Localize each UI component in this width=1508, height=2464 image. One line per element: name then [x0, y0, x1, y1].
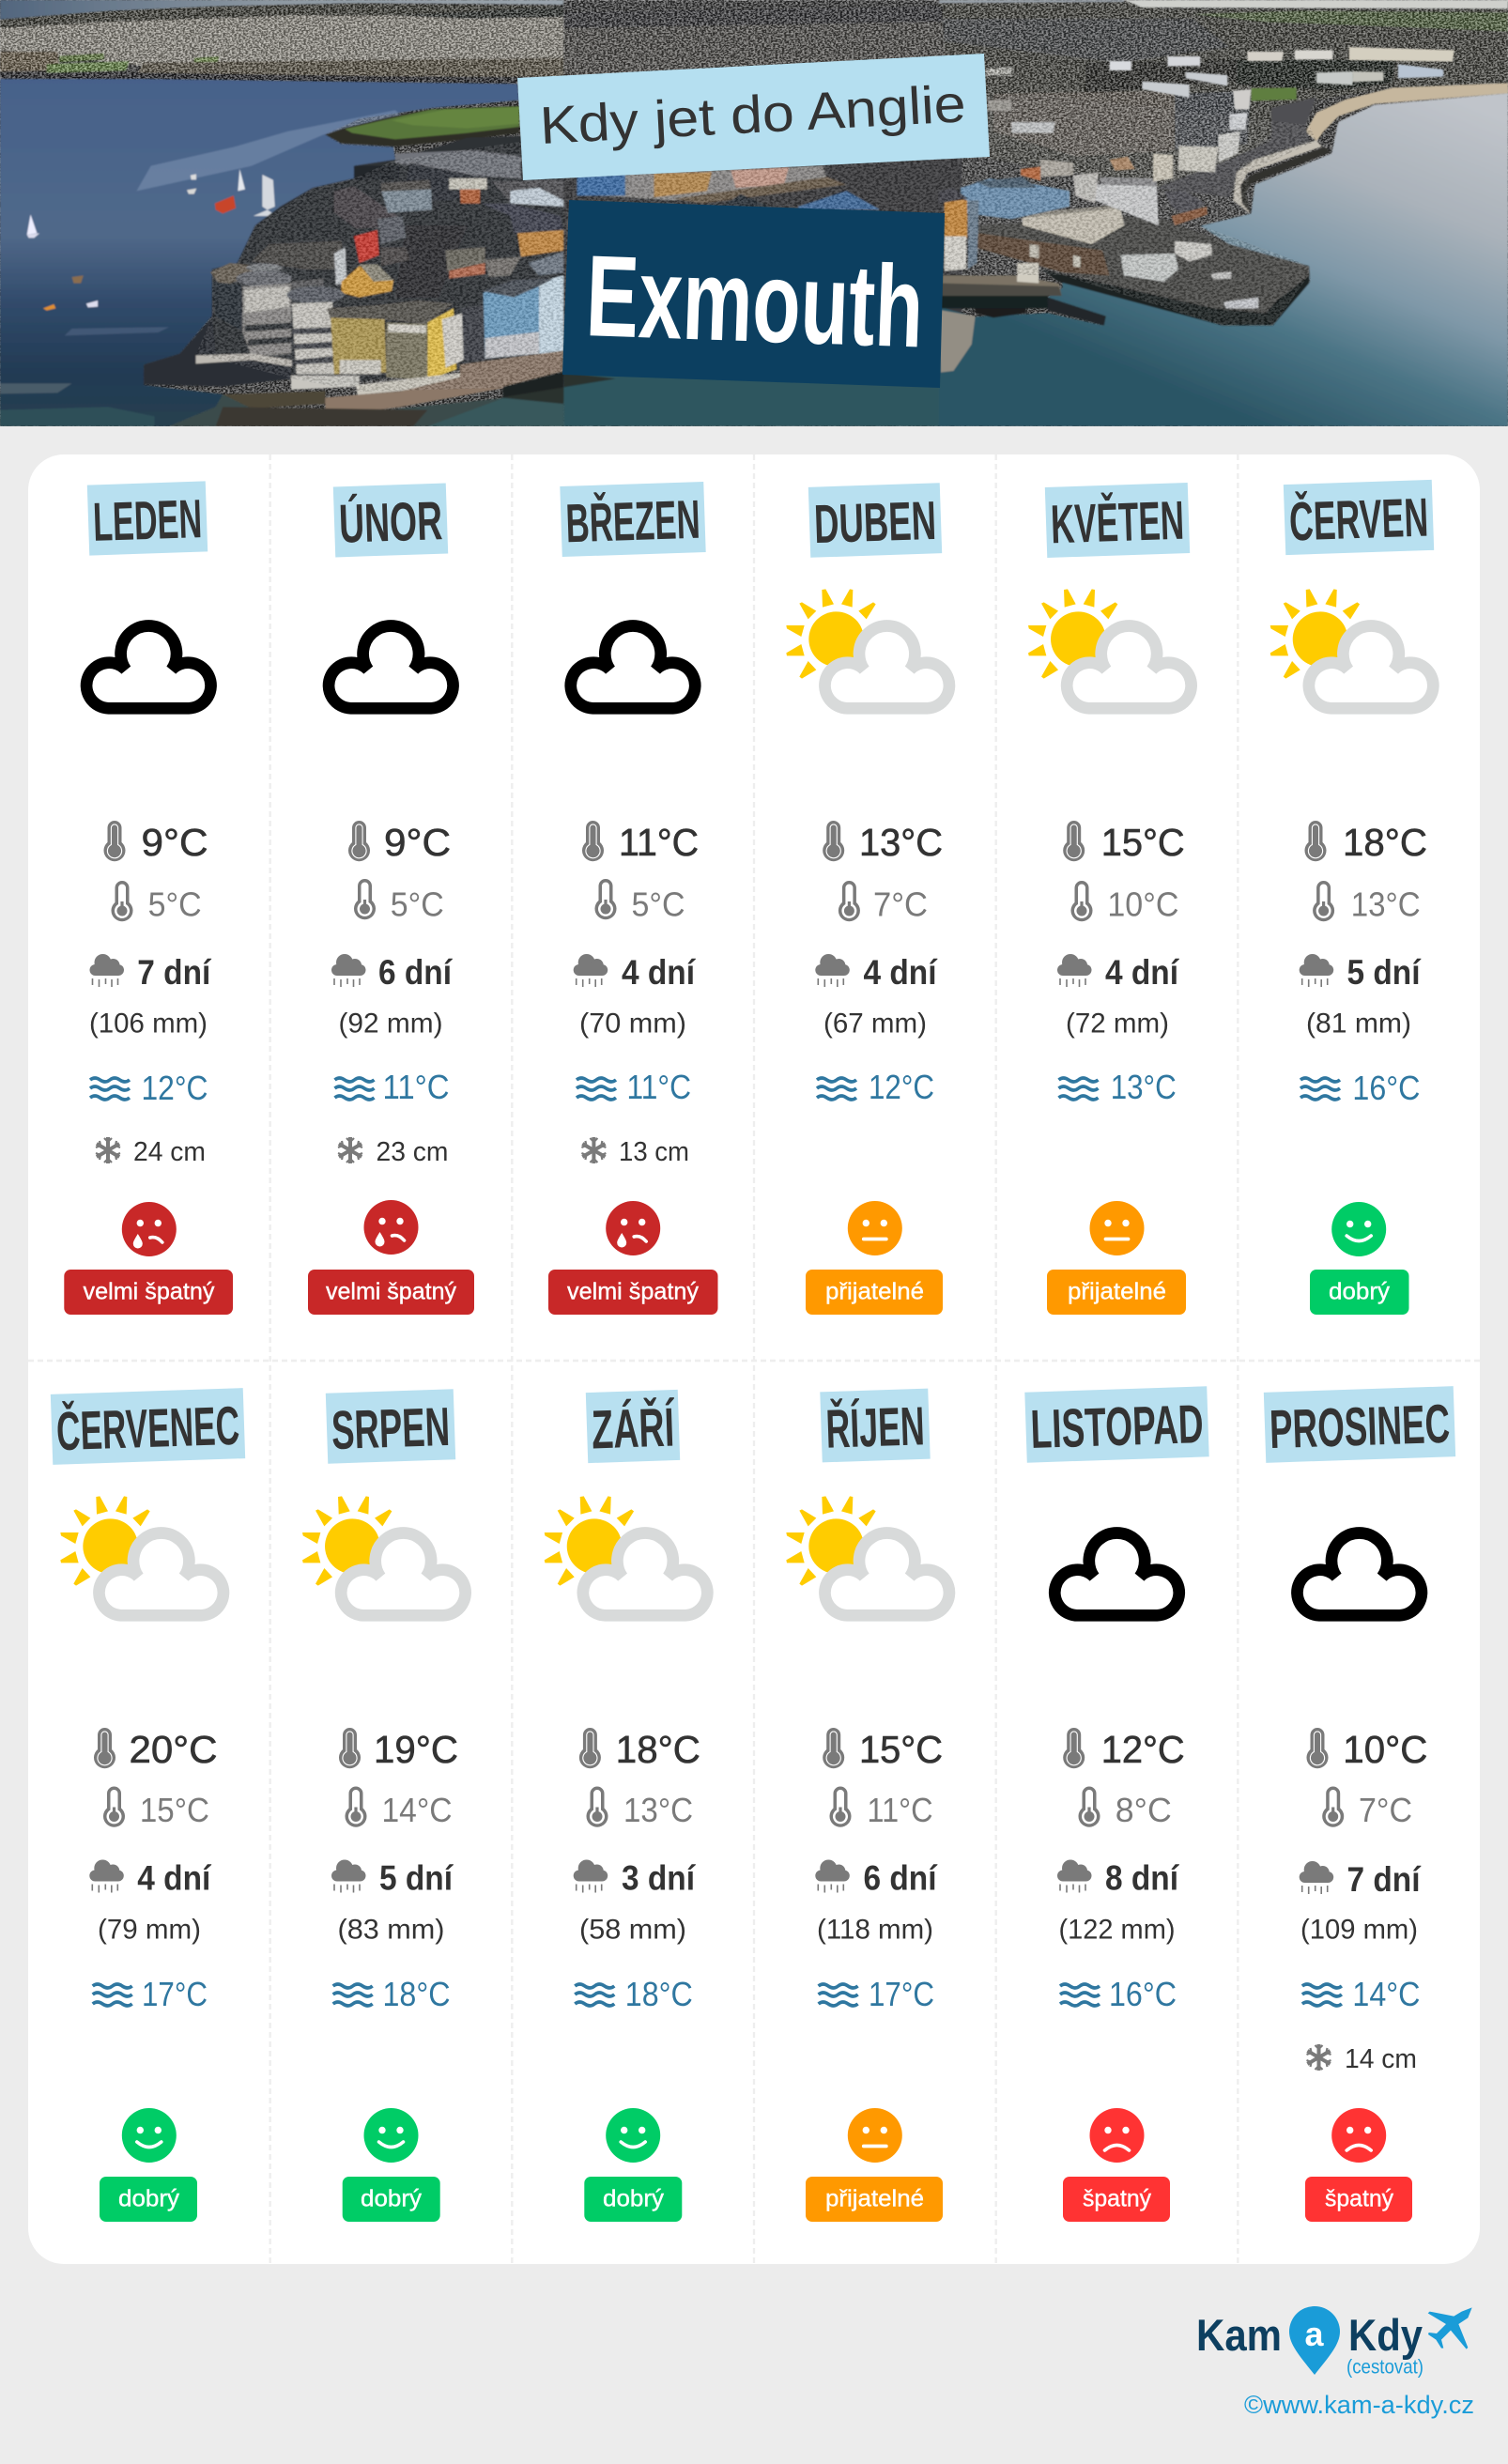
low temperature — [839, 881, 928, 924]
high temperature: 15°C — [859, 1728, 943, 1771]
rating badge — [64, 1270, 233, 1315]
weather icon: cloud — [1297, 1533, 1422, 1615]
high temperature — [1307, 1728, 1427, 1771]
month label — [586, 1390, 680, 1463]
column: listopad — [1024, 1386, 1209, 2222]
low temperature — [1070, 881, 1178, 924]
rating face — [848, 1201, 902, 1255]
low temperature — [354, 879, 444, 924]
rating badge: velmi špatný — [326, 1279, 456, 1305]
column: leden — [64, 481, 233, 1315]
rating face — [1089, 1201, 1144, 1255]
rainy days — [331, 1859, 454, 1897]
weather icon: cloud — [571, 626, 695, 708]
rating face — [122, 1202, 177, 1256]
high temperature — [579, 1728, 700, 1771]
month label — [820, 1389, 931, 1462]
rating badge — [343, 2177, 440, 2222]
rainy days: 3 dní — [622, 1859, 697, 1897]
rainy days — [1057, 953, 1180, 992]
month label: DUBEN — [813, 490, 937, 555]
sea temperature: 16°C — [1109, 1975, 1177, 2013]
precipitation: (58 mm) — [579, 1914, 686, 1946]
high temperature: 18°C — [616, 1728, 700, 1771]
icon: map pin: a — [1305, 2315, 1324, 2353]
sea temperature — [90, 1069, 208, 1107]
low temperature — [830, 1786, 933, 1829]
rating badge — [806, 2177, 943, 2222]
weather icon: sun and cloud — [302, 1496, 466, 1615]
rating badge: přijatelné — [1068, 1279, 1166, 1305]
month label: SRPEN — [331, 1396, 451, 1461]
snow — [1307, 2044, 1417, 2074]
weather icon: sun and cloud — [1270, 589, 1433, 708]
low temperature: 7°C — [873, 885, 928, 924]
high temperature — [339, 1728, 458, 1771]
rating badge — [1310, 1270, 1408, 1315]
rainy days: 5 dní — [379, 1859, 454, 1897]
rainy days — [90, 953, 212, 992]
weather icon: cloud — [1054, 1533, 1179, 1615]
weather icon: sun and cloud — [786, 1496, 949, 1615]
low temperature — [346, 1786, 453, 1829]
rating badge — [1063, 2177, 1170, 2222]
centre: coloured houses and harbour water — [500, 157, 962, 426]
rating badge: špatný — [1083, 2186, 1151, 2212]
sea temperature: 12°C — [869, 1068, 934, 1106]
rainy days: 4 dní — [864, 953, 938, 992]
rating badge — [584, 2177, 682, 2222]
sea temperature: 16°C — [1352, 1069, 1420, 1107]
low temperature: 5°C — [391, 885, 444, 924]
icon: airplane — [1428, 2307, 1472, 2349]
weather icon: sun and cloud — [786, 589, 949, 708]
rating face — [122, 2108, 177, 2163]
weather icon: cloud — [86, 626, 211, 708]
sea temperature — [1059, 1068, 1177, 1106]
rating badge — [548, 1270, 717, 1315]
high temperature — [94, 1728, 218, 1771]
title banner: Kdy jet do Anglie — [517, 54, 990, 180]
high temperature: 13°C — [859, 821, 943, 864]
rating badge: špatný — [1325, 2186, 1393, 2212]
logo: Kam a Kdy: Kam — [1196, 2310, 1282, 2360]
rating face — [1331, 1202, 1386, 1256]
right half: town front, beach, pier and sea — [939, 0, 1508, 426]
sea temperature: 18°C — [625, 1975, 693, 2013]
rainy days — [1057, 1859, 1180, 1897]
rainy days: 5 dní — [1346, 953, 1422, 992]
low temperature: 10°C — [1107, 885, 1178, 924]
photo texture — [0, 0, 1508, 426]
rainy days: 4 dní — [1105, 953, 1180, 992]
column: červenec — [51, 1388, 245, 2222]
column: prosinec — [1264, 1386, 1455, 2222]
high temperature — [1305, 821, 1427, 864]
rating badge — [100, 2177, 197, 2222]
month label — [87, 481, 208, 556]
month label: ZÁŘÍ — [591, 1397, 676, 1460]
column: září — [545, 1390, 707, 2222]
sea temperature — [575, 1975, 693, 2013]
column: říjen — [786, 1389, 949, 2222]
precipitation: (79 mm) — [98, 1914, 201, 1946]
column: květen — [1028, 483, 1192, 1315]
column: březen — [548, 482, 717, 1315]
logo: Kam a Kdy: (cestovat) — [1346, 2357, 1423, 2378]
rating badge: velmi špatný — [567, 1279, 699, 1305]
high temperature: 18°C — [1343, 821, 1427, 864]
rating face — [1331, 2108, 1386, 2163]
month label — [560, 482, 706, 557]
month label — [1284, 480, 1434, 555]
snow: 24 cm — [133, 1137, 206, 1167]
weather icon: sun and cloud — [1028, 589, 1192, 708]
sea temperature — [334, 1068, 449, 1106]
peninsula base — [212, 134, 563, 382]
precipitation: (83 mm) — [338, 1914, 445, 1946]
low temperature: 11°C — [868, 1791, 933, 1829]
sea temperature — [1300, 1069, 1420, 1107]
rating face — [364, 2108, 419, 2163]
sea temperature — [1302, 1975, 1420, 2013]
title banner: Exmouth: Exmouth — [584, 232, 926, 373]
rating badge: velmi špatný — [83, 1279, 215, 1305]
precipitation: (67 mm) — [823, 1009, 927, 1040]
rating badge: přijatelné — [825, 1279, 924, 1305]
rainy days: 7 dní — [137, 953, 212, 992]
column: červen — [1270, 480, 1434, 1315]
rating badge: přijatelné — [825, 2186, 924, 2212]
sea temperature — [819, 1975, 934, 2013]
high temperature: 12°C — [1101, 1728, 1185, 1771]
snow — [96, 1137, 206, 1167]
month label — [333, 484, 448, 557]
rating badge — [806, 1270, 943, 1315]
low temperature — [586, 1786, 693, 1829]
header photo: aerial view of Exmouth — [0, 0, 1508, 426]
precipitation: (72 mm) — [1066, 1009, 1169, 1040]
high temperature — [823, 1728, 943, 1771]
rating face — [606, 1201, 660, 1255]
snow — [338, 1137, 449, 1167]
rating badge: dobrý — [361, 2186, 423, 2212]
rating face — [364, 1200, 419, 1255]
website credit: ©www.kam-a-kdy.cz — [1244, 2391, 1474, 2419]
rainy days — [89, 1859, 212, 1897]
logo: Kam a Kdy: Kdy — [1348, 2310, 1423, 2360]
rating face — [848, 2108, 902, 2163]
promenade park — [325, 106, 519, 146]
month label — [1024, 1386, 1209, 1463]
sea temperature — [93, 1975, 208, 2013]
rating badge: dobrý — [1329, 1279, 1391, 1305]
rating badge — [1305, 2177, 1412, 2222]
precipitation: (81 mm) — [1306, 1009, 1411, 1040]
rating badge: dobrý — [603, 2186, 665, 2212]
low temperature: 8°C — [1116, 1791, 1172, 1829]
rainy days — [1300, 953, 1422, 992]
high temperature — [1063, 1728, 1185, 1771]
month label: ÚNOR — [338, 490, 443, 555]
low temperature: 5°C — [148, 885, 202, 924]
sea temperature: 18°C — [383, 1975, 451, 2013]
snow: 14 cm — [1345, 2044, 1417, 2074]
low temperature: 5°C — [631, 885, 685, 924]
sea temperature: 17°C — [142, 1975, 208, 2013]
rating badge: dobrý — [118, 2186, 180, 2212]
low temperature: 14°C — [381, 1791, 453, 1829]
high temperature: 10°C — [1343, 1728, 1427, 1771]
low temperature — [1313, 881, 1421, 924]
high temperature: 9°C — [384, 821, 451, 864]
sea temperature: 11°C — [627, 1068, 691, 1106]
high temperature — [823, 821, 943, 864]
month label — [326, 1389, 455, 1464]
high temperature — [582, 821, 699, 864]
rainy days — [815, 953, 938, 992]
high temperature: 19°C — [374, 1728, 458, 1771]
low temperature: 13°C — [623, 1791, 693, 1829]
column: srpen — [302, 1389, 466, 2222]
weather icon: sun and cloud — [60, 1496, 223, 1615]
rating face — [606, 2108, 660, 2163]
snow — [581, 1137, 689, 1167]
high temperature: 9°C — [141, 821, 208, 864]
rainy days — [1300, 1860, 1422, 1899]
high temperature — [1063, 821, 1185, 864]
sea temperature — [333, 1975, 451, 2013]
month label: ČERVENEC — [55, 1395, 240, 1462]
month label — [1045, 483, 1190, 558]
precipitation: (109 mm) — [1300, 1914, 1418, 1946]
sea temperature: 14°C — [1352, 1975, 1420, 2013]
weather icon: sun and cloud — [545, 1496, 707, 1615]
precipitation: (122 mm) — [1059, 1914, 1176, 1946]
snow: 23 cm — [376, 1137, 449, 1167]
low temperature: 13°C — [1351, 885, 1421, 924]
month label: BŘEZEN — [565, 489, 701, 554]
column: duben — [786, 483, 949, 1315]
rainy days: 6 dní — [864, 1859, 938, 1897]
sea temperature: 17°C — [869, 1975, 934, 2013]
column: únor — [308, 484, 474, 1315]
rating badge — [1047, 1270, 1186, 1315]
sea temperature — [1060, 1975, 1177, 2013]
month label — [808, 483, 942, 558]
precipitation: (70 mm) — [579, 1009, 686, 1040]
town texture overlay — [197, 94, 1316, 392]
rating badge — [308, 1270, 474, 1315]
sea temperature: 12°C — [141, 1069, 208, 1107]
month label: ŘÍJEN — [825, 1395, 926, 1460]
rainy days — [331, 953, 454, 992]
rainy days — [815, 1859, 938, 1897]
high temperature — [348, 821, 451, 864]
month label — [51, 1388, 245, 1465]
low temperature — [103, 1786, 209, 1829]
rainy days: 8 dní — [1105, 1859, 1180, 1897]
high temperature: 15°C — [1101, 821, 1185, 864]
low temperature — [111, 881, 202, 924]
title banner: Exmouth — [562, 200, 945, 388]
month label: KVĚTEN — [1050, 490, 1185, 555]
rainy days — [574, 1859, 697, 1897]
sea temperature: 11°C — [383, 1068, 449, 1106]
panel: monthly climate table — [28, 454, 1480, 2264]
low temperature — [595, 879, 685, 924]
title banner: Kdy jet do Anglie: Kdy jet do Anglie — [538, 73, 967, 155]
rating face — [1089, 2108, 1144, 2163]
logo: Kam a Kdy — [1196, 2306, 1472, 2378]
low temperature: 7°C — [1359, 1791, 1412, 1829]
sea temperature — [577, 1068, 691, 1106]
snow: 13 cm — [619, 1137, 689, 1167]
low temperature — [1322, 1786, 1412, 1829]
precipitation: (118 mm) — [817, 1914, 933, 1946]
quays — [144, 317, 291, 387]
icon: map pin — [1289, 2306, 1340, 2375]
month label: LEDEN — [92, 488, 203, 553]
high temperature — [103, 821, 208, 864]
boats — [27, 214, 37, 235]
sea temperature: 13°C — [1111, 1068, 1177, 1106]
rainy days: 6 dní — [378, 953, 454, 992]
left half: sky, estuary and peninsula — [0, 0, 563, 426]
rainy days: 7 dní — [1346, 1860, 1422, 1899]
low temperature — [1078, 1786, 1172, 1829]
high temperature: 20°C — [130, 1728, 218, 1771]
precipitation: (92 mm) — [338, 1009, 443, 1040]
low temperature: 15°C — [140, 1791, 209, 1829]
rainy days: 4 dní — [137, 1859, 212, 1897]
high temperature: 11°C — [619, 821, 699, 864]
sea temperature — [817, 1068, 934, 1106]
precipitation: (106 mm) — [89, 1009, 208, 1040]
month label: LISTOPAD — [1030, 1394, 1205, 1460]
weather icon: cloud — [329, 626, 454, 708]
rainy days — [574, 953, 697, 992]
rainy days: 4 dní — [622, 953, 697, 992]
